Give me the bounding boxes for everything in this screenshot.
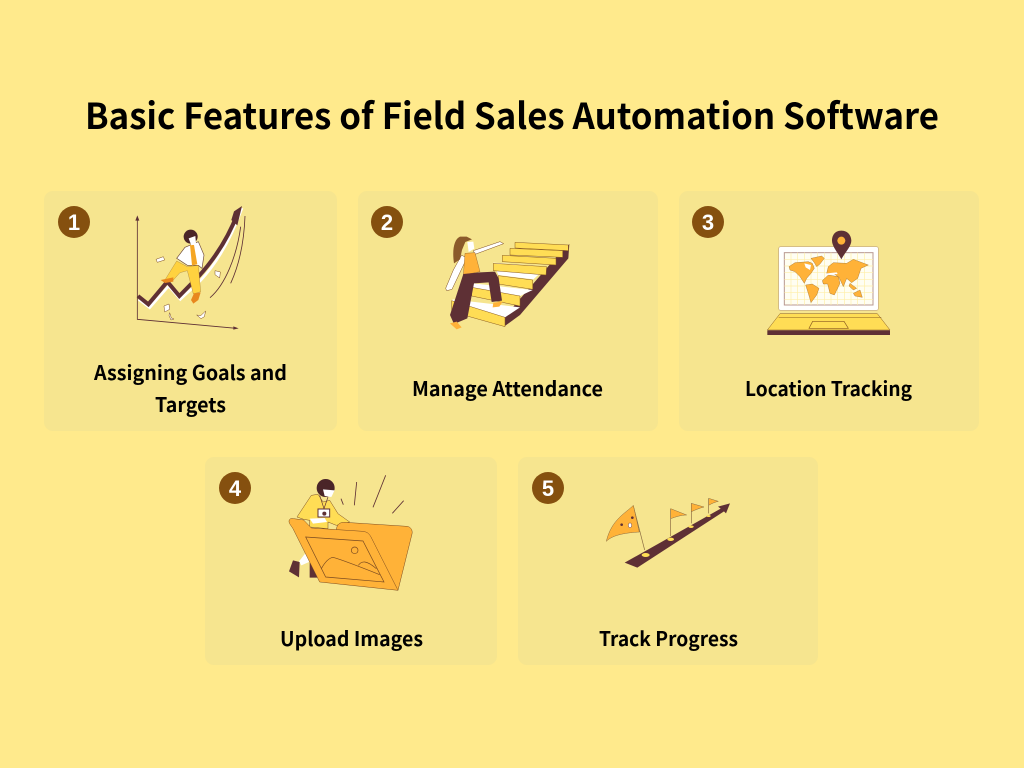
label: Upload Images: [280, 623, 423, 652]
label: Targets: [155, 389, 226, 418]
icon: flags along road: [606, 498, 730, 568]
badge 1: [58, 206, 90, 238]
badge 5: [532, 472, 564, 504]
icon: woman climbing stairs: [446, 237, 569, 329]
icon: woman with image folder: [289, 475, 412, 590]
panel: assigning goals and targets: [44, 191, 337, 431]
badge 5: 5: [542, 476, 554, 501]
badge 4: [219, 472, 251, 504]
badge 2: [371, 206, 403, 238]
label: Track Progress: [599, 623, 738, 652]
badge 3: 3: [702, 210, 714, 235]
icon: man riding rising chart: [135, 206, 245, 330]
icon: laptop with world map and pin: [767, 231, 890, 335]
panel: track progress: [518, 457, 818, 665]
label: Assigning Goals and: [93, 357, 287, 386]
title: Basic Features of Field Sales Automation Software: [85, 88, 939, 140]
label: [93, 357, 287, 418]
label: Manage Attendance: [412, 373, 603, 402]
badge 3: [692, 206, 724, 238]
label: Location Tracking: [745, 373, 912, 402]
badge 1: 1: [68, 210, 80, 235]
badge 4: 4: [229, 476, 242, 501]
panel: location tracking: [679, 191, 979, 431]
panel: upload images: [205, 457, 497, 665]
badge 2: 2: [381, 210, 393, 235]
panel: manage attendance: [358, 191, 658, 431]
